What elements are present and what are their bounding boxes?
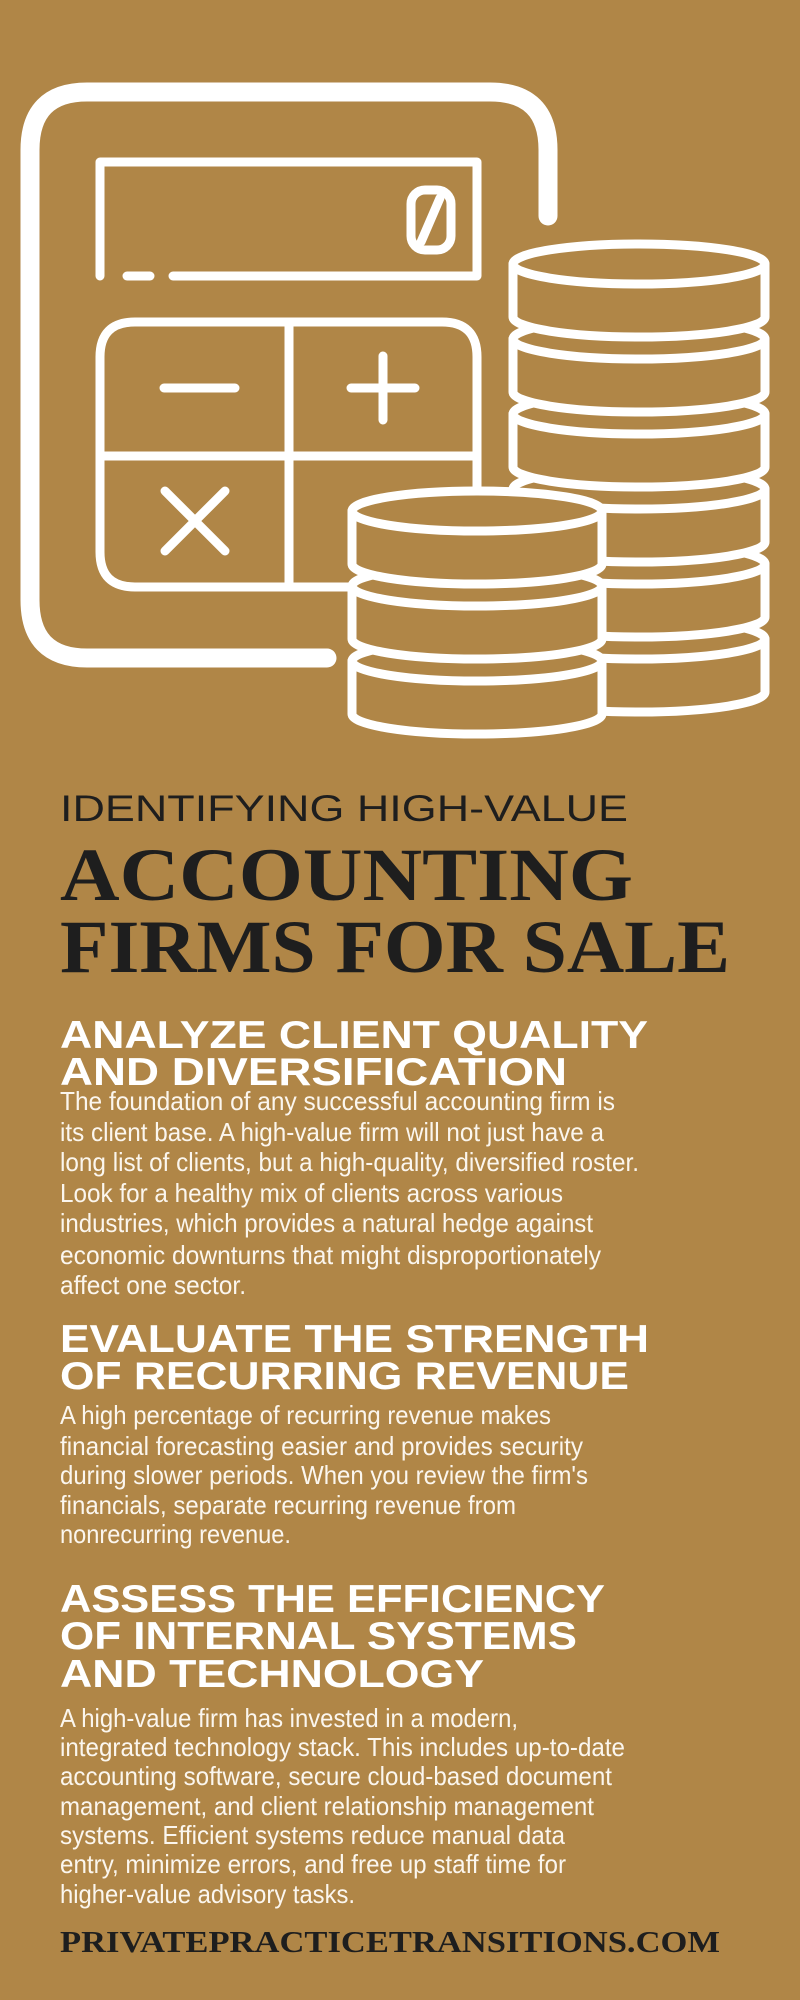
heading: internal systems (60, 1578, 605, 1696)
calculator body (30, 92, 548, 658)
title: main (60, 834, 730, 989)
text block: client quality: The foundation of any successful accounting firm is (60, 1086, 615, 1116)
text block: internal systems: entry, minimize errors, and free up staff time for (60, 1849, 566, 1879)
heading: analyze client quality: ANALYZE CLIENT QUALITY (60, 1014, 648, 1057)
text block: recurring revenue: financial forecasting easier and provides security (60, 1431, 583, 1461)
calculator display (100, 162, 477, 276)
heading: analyze client quality (60, 1014, 648, 1094)
text block: internal systems: systems. Efficient systems reduce manual data (60, 1820, 565, 1850)
text block: client quality: Look for a healthy mix of clients across various (60, 1178, 563, 1208)
text block: recurring revenue: financials, separate recurring revenue from (60, 1490, 516, 1520)
heading: recurring revenue (60, 1318, 649, 1398)
text block: client quality: economic downturns that might disproportionately (60, 1240, 601, 1270)
text block: internal systems (60, 1703, 625, 1909)
footer: website: PRIVATEPRACTICETRANSITIONS.COM (60, 1924, 720, 1959)
heading: recurring revenue: EVALUATE THE STRENGTH (60, 1318, 649, 1361)
text block: internal systems: accounting software, secure cloud-based document (60, 1761, 613, 1791)
text block: client quality (60, 1086, 639, 1300)
text block: client quality: industries, which provides a natural hedge against (60, 1208, 594, 1238)
coins: back stack (513, 244, 765, 712)
coins: front stack (352, 491, 602, 734)
heading: internal systems: AND TECHNOLOGY (60, 1653, 484, 1696)
text block: client quality: affect one sector. (60, 1270, 246, 1300)
text block: internal systems: management, and client relationship management (60, 1791, 595, 1821)
text block: client quality: long list of clients, but a high-quality, diversified roster. (60, 1147, 639, 1177)
heading: internal systems: ASSESS THE EFFICIENCY (60, 1578, 605, 1621)
icon: calculator with coins (30, 92, 765, 734)
title: main: ACCOUNTING (60, 834, 633, 917)
text block: internal systems: A high-value firm has invested in a modern, (60, 1703, 518, 1733)
text block: internal systems: integrated technology stack. This includes up-to-date (60, 1732, 625, 1762)
text block: recurring revenue: A high percentage of recurring revenue makes (60, 1400, 551, 1430)
title: subtitle line: IDENTIFYING HIGH-VALUE (60, 788, 628, 829)
text block: recurring revenue: during slower periods. When you review the firm's (60, 1460, 588, 1490)
text block: internal systems: higher-value advisory tasks. (60, 1879, 355, 1909)
title: main: FIRMS FOR SALE (60, 906, 730, 989)
heading: analyze client quality: AND DIVERSIFICATION (60, 1051, 567, 1094)
text block: recurring revenue: nonrecurring revenue. (60, 1519, 291, 1549)
heading: recurring revenue: OF RECURRING REVENUE (60, 1355, 629, 1398)
calculator keypad (100, 322, 477, 587)
text block: recurring revenue (60, 1400, 588, 1549)
heading: internal systems: OF INTERNAL SYSTEMS (60, 1615, 577, 1658)
text block: client quality: its client base. A high-value firm will not just have a (60, 1117, 604, 1147)
